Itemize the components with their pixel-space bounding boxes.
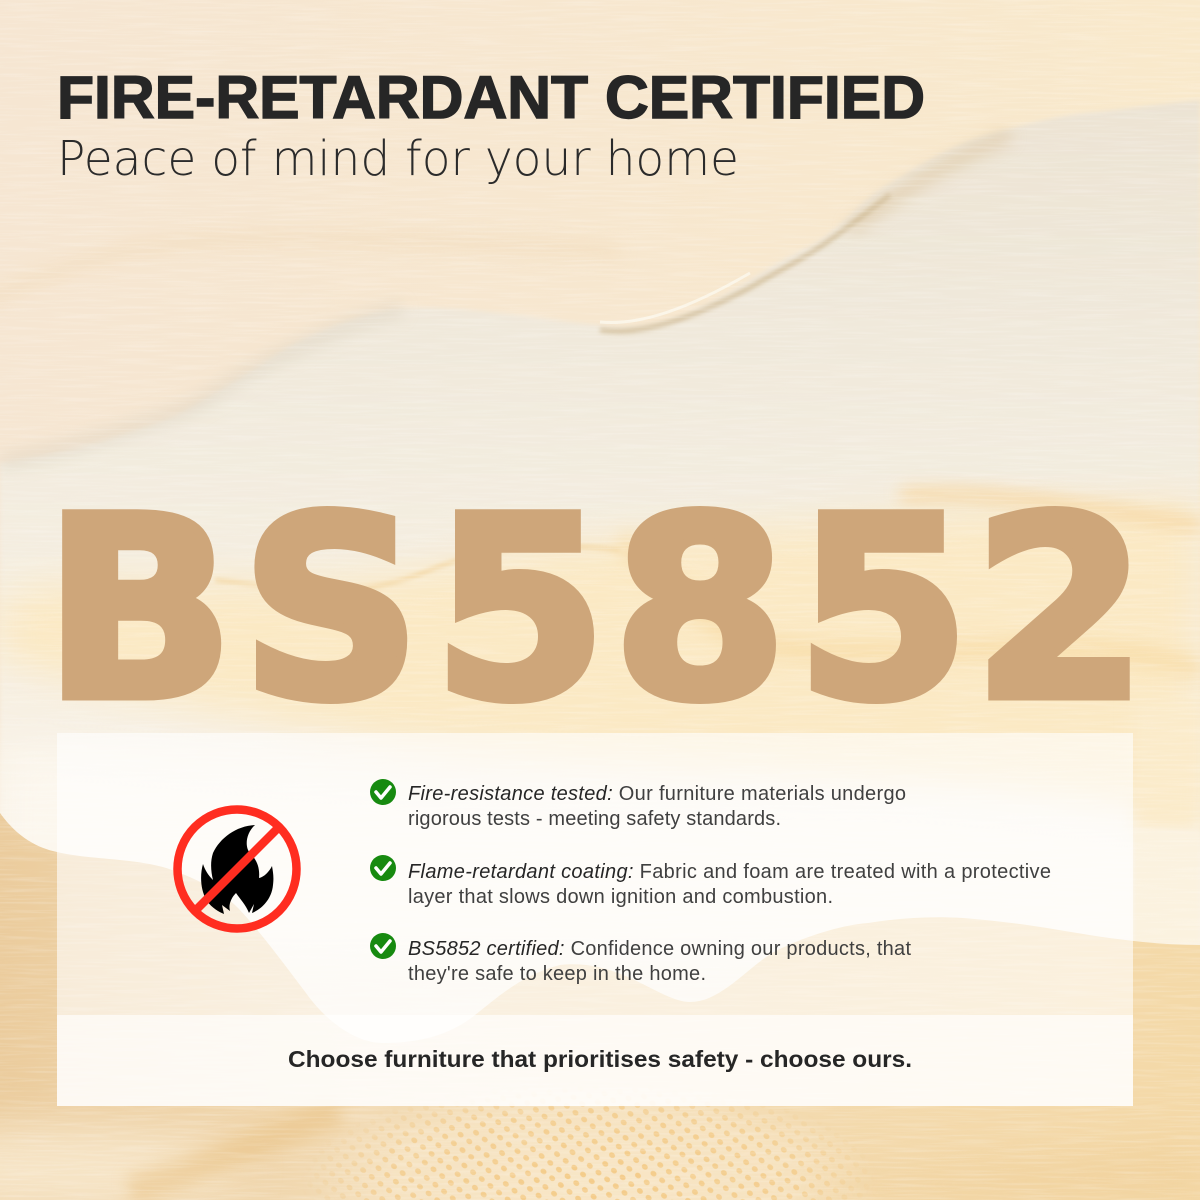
benefit: fire-resistance tested [370, 779, 906, 830]
icon: check [370, 855, 396, 881]
benefit: fire-resistance tested: Fire-resistance tested: Our furniture materials undergo [408, 783, 906, 805]
benefit: flame-retardant coating: Flame-retardant coating: Fabric and foam are treated with a protective [408, 861, 1051, 883]
panel: benefits [57, 733, 1133, 1015]
icon: no fire [178, 810, 296, 928]
subtitle: Peace of mind for your home [57, 131, 739, 187]
title: FIRE-RETARDANT CERTIFIED [57, 64, 925, 131]
benefit: flame-retardant coating [370, 855, 1051, 908]
icon: check [370, 779, 396, 805]
benefit: BS5852 certified: BS5852 certified: Confidence owning our products, that [408, 938, 911, 960]
panel: closing statement [57, 1015, 1133, 1106]
icon: check [370, 933, 396, 959]
benefit: fire-resistance tested: rigorous tests - meeting safety standards. [408, 808, 781, 830]
benefit: BS5852 certified [370, 933, 911, 985]
benefit: flame-retardant coating: layer that slows down ignition and combustion. [408, 886, 833, 908]
panel: closing statement: Choose furniture that prioritises safety - choose ours. [288, 1046, 912, 1072]
large standard code: BS5852 [44, 464, 1147, 755]
benefit: BS5852 certified: they're safe to keep in the home. [408, 963, 706, 985]
